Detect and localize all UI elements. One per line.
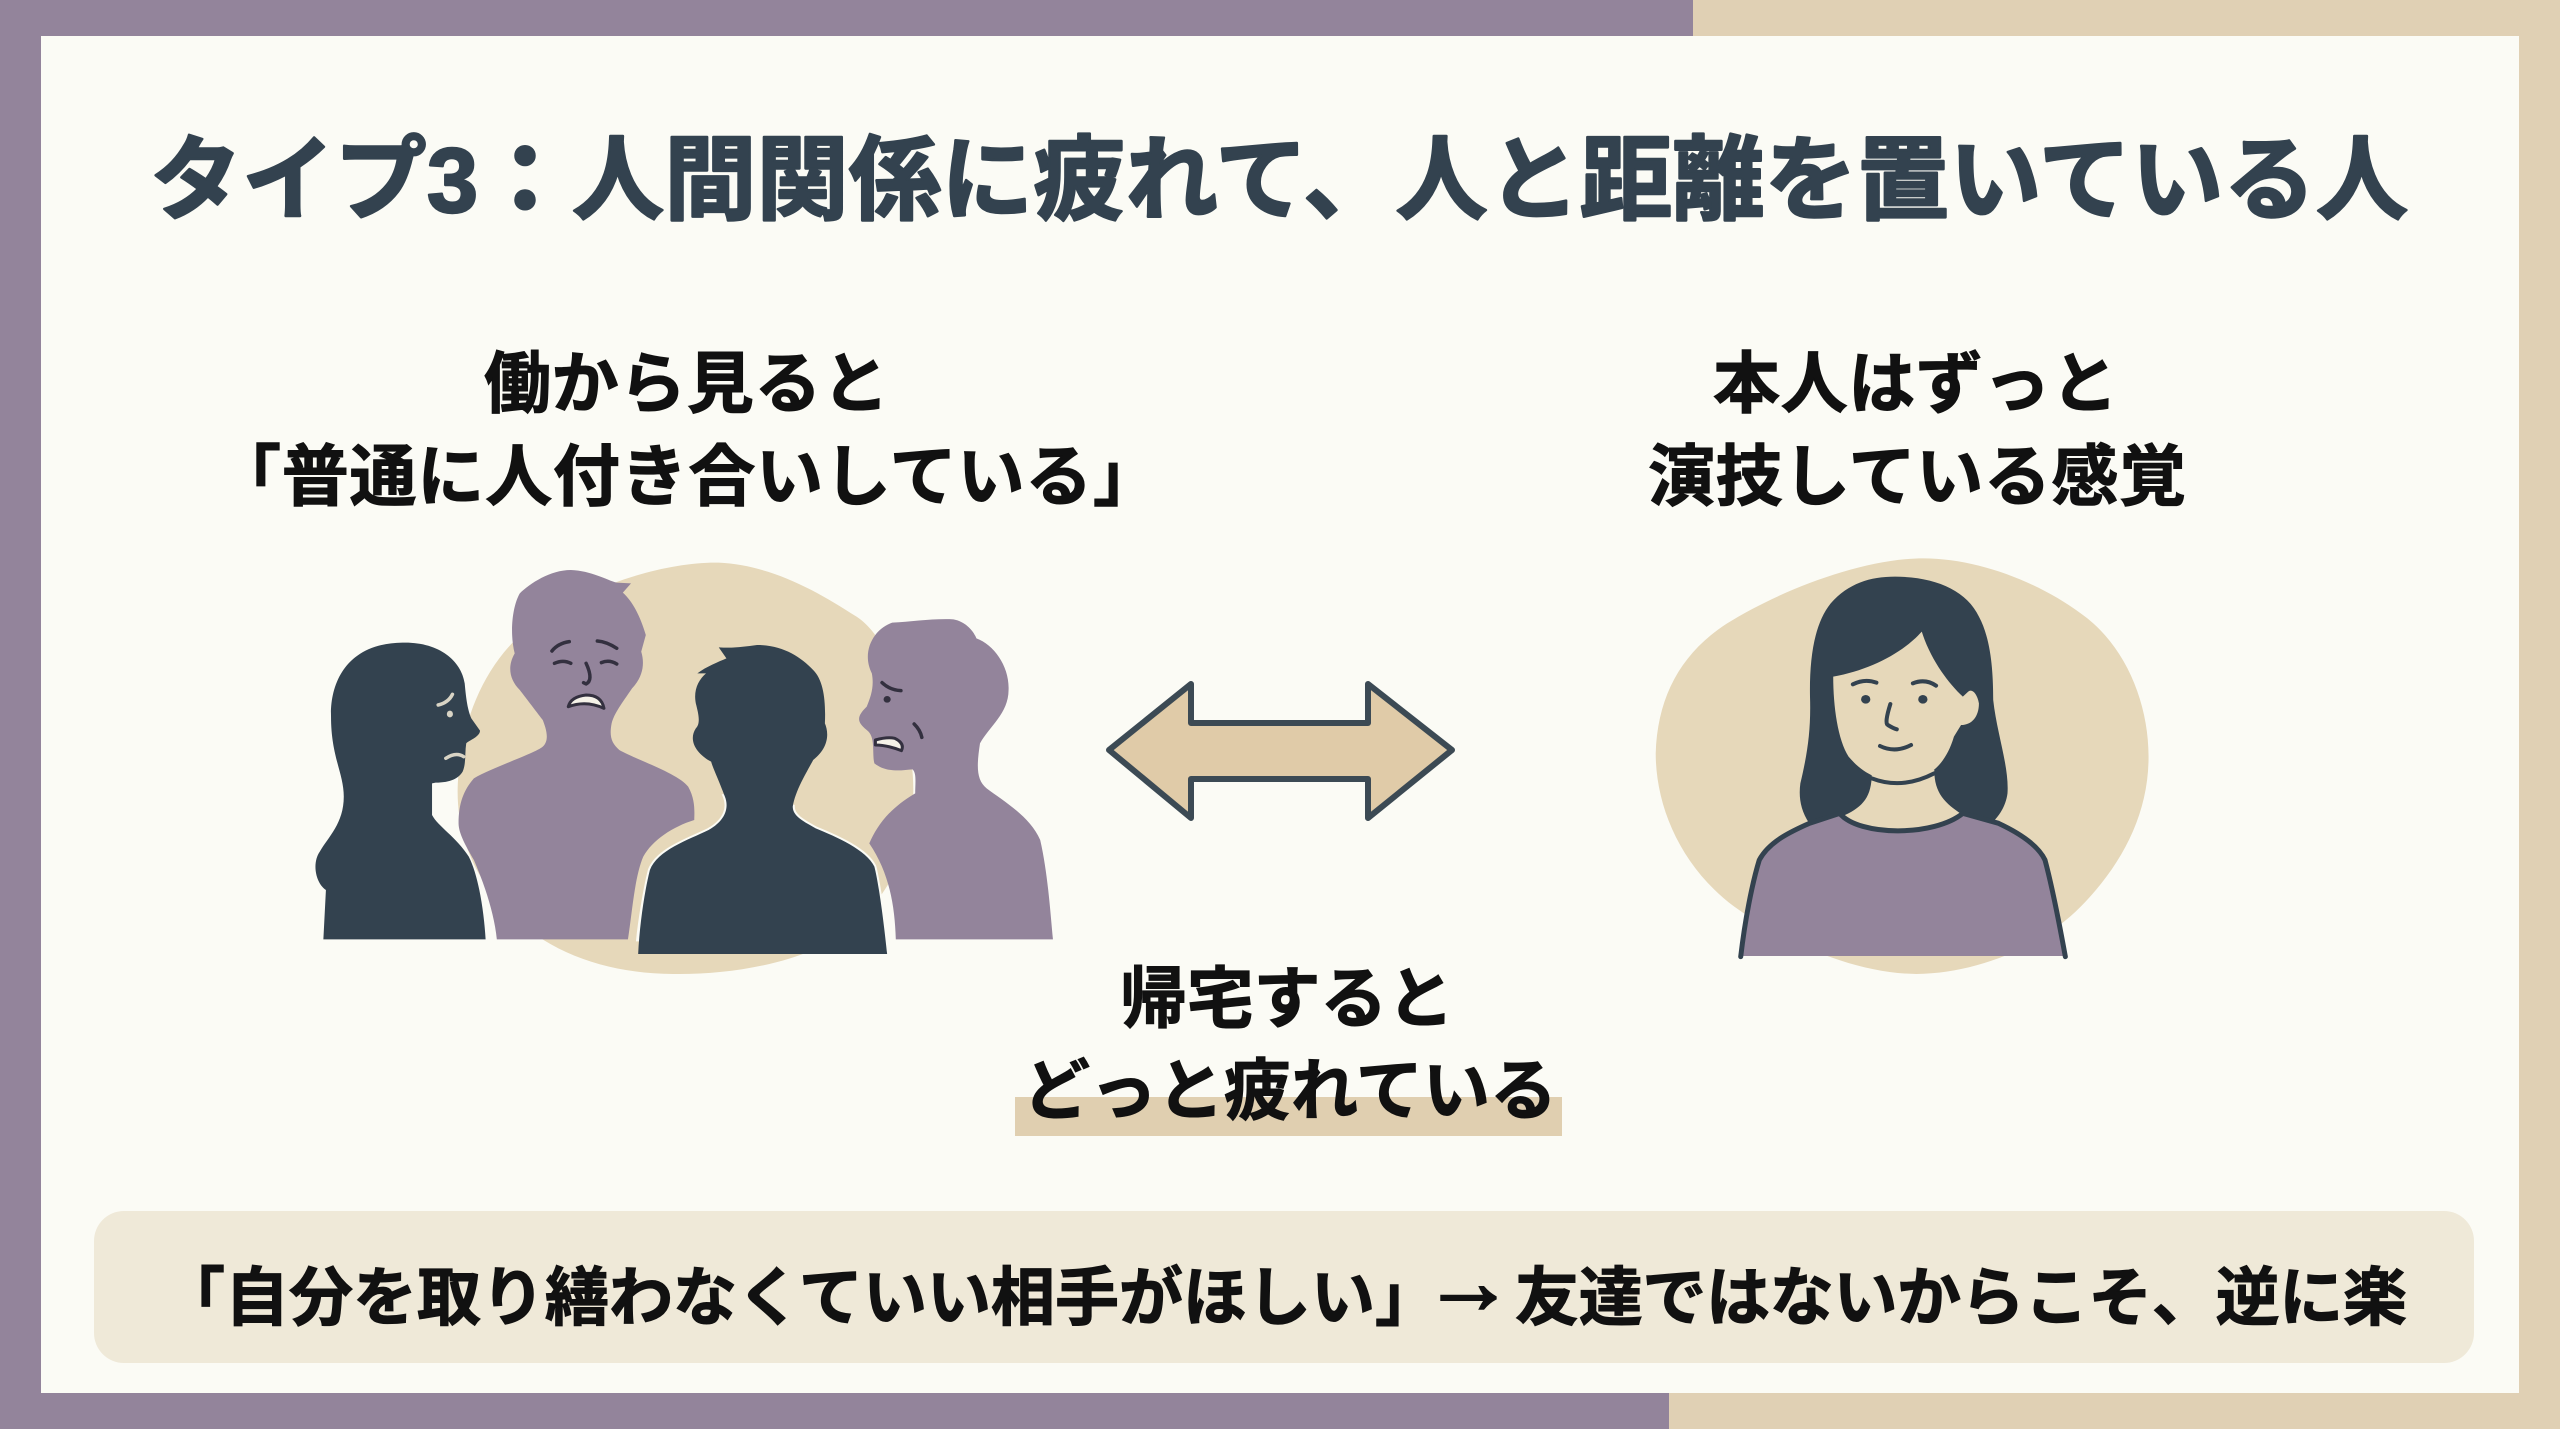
illustration: group of people	[315, 563, 1053, 974]
person: dark woman profile	[315, 643, 486, 939]
right heading: inner feeling: 演技している感覚	[1648, 440, 2186, 515]
neck	[1841, 770, 1966, 837]
right heading: inner feeling: 本人はずっと	[1713, 347, 2118, 422]
tan blob behind group	[458, 563, 913, 974]
tan blob behind woman	[1656, 558, 2149, 974]
title: 人間関係に疲れて、人と距離を置いている人	[572, 130, 2408, 232]
shirt	[1741, 813, 2065, 957]
callout background	[94, 1211, 2474, 1363]
center text: 帰宅すると	[1120, 962, 1454, 1037]
left heading: outside view: 「普通に人付き合いしている」	[214, 440, 1160, 515]
facial features	[1853, 681, 1936, 783]
bottom callout	[94, 1211, 2474, 1363]
callout text	[161, 1232, 2407, 1334]
callout text: 友達ではないからこそ、逆に楽	[1515, 1262, 2407, 1334]
face	[1833, 632, 1979, 782]
title: ：	[479, 130, 571, 232]
left heading: outside view: 働から見ると	[484, 347, 889, 422]
hair	[1800, 577, 2008, 823]
left heading: outside view	[214, 347, 1160, 515]
right heading: inner feeling	[1648, 347, 2186, 515]
person: dark man back view	[638, 645, 887, 954]
illustration: single woman	[1656, 558, 2149, 974]
center text: どっと疲れている	[1023, 1054, 1557, 1129]
highlight bar	[1015, 1097, 1562, 1136]
callout text: →	[1423, 1232, 1514, 1333]
center statement with highlight	[1015, 962, 1562, 1136]
callout text: 「自分を取り繕わなくていい相手がほしい」	[161, 1262, 1439, 1334]
center text	[1023, 962, 1557, 1129]
person: purple sad man	[459, 570, 694, 939]
double-headed arrow	[1109, 684, 1452, 818]
person: purple profile	[859, 619, 1053, 939]
title: タイプ3	[150, 130, 478, 232]
